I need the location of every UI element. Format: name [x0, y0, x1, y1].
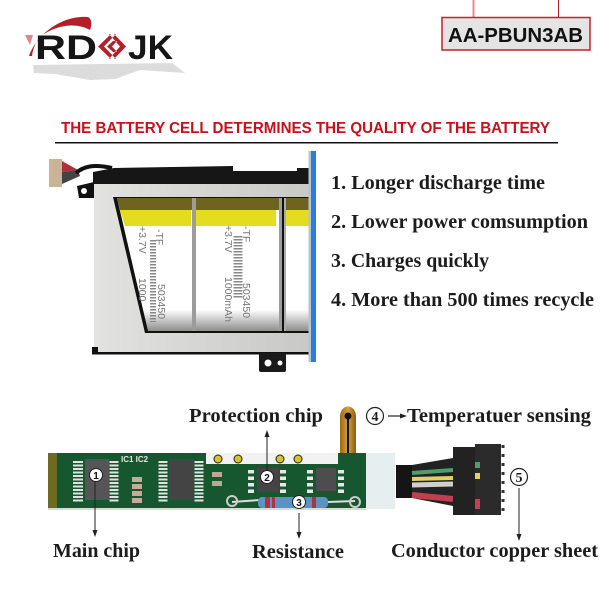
temperature sensor probe [340, 406, 356, 453]
cell 3 [286, 198, 311, 331]
cell 2 [196, 198, 279, 331]
cell 2: -TF [240, 226, 252, 242]
cell 1: -TF [153, 229, 165, 245]
feature list: 1. Longer discharge time [331, 173, 545, 194]
label: conductor copper sheet [391, 468, 599, 562]
label: protection chip: Protection chip [189, 406, 323, 427]
cell window [113, 197, 311, 333]
feature list: 4. More than 500 times recycle [331, 290, 594, 311]
cell 1: 503450 [155, 284, 167, 319]
label: main chip: Main chip [53, 541, 140, 562]
cable and connector [396, 444, 503, 515]
logo chevrons [98, 34, 126, 59]
feature list: 2. Lower power comsumption [331, 212, 588, 233]
component column [132, 477, 142, 505]
protection chip: 2 [264, 473, 270, 484]
right chip [310, 468, 341, 494]
feature list [331, 173, 594, 311]
main chip [78, 459, 114, 502]
board silkscreen: IC1 IC2 [121, 455, 149, 464]
protection chip [251, 468, 283, 494]
cell 2: +3.7V [222, 225, 234, 253]
cell separators [192, 198, 196, 331]
circuit board [48, 453, 395, 510]
label: conductor copper sheet: Conductor copper sheet [391, 541, 599, 562]
label: conductor copper sheet: 5 [516, 471, 522, 486]
logo swoosh [29, 17, 91, 56]
feature list: 3. Charges quickly [331, 251, 489, 272]
logo wordmark right: JK [128, 29, 173, 67]
mounting tab left [77, 182, 98, 198]
label: main chip [53, 482, 140, 562]
cell 1: +3.7V [136, 226, 148, 254]
model number tag: AA-PBUN3AB [448, 25, 583, 47]
cell 1: 1000 [136, 278, 148, 302]
label: protection chip [189, 406, 323, 470]
logo [25, 17, 185, 80]
logo triangle [25, 35, 33, 45]
cell 2: 1000mAh [222, 277, 234, 322]
small components [212, 472, 222, 490]
cell 2: 503450 [240, 283, 252, 318]
metal frame [94, 184, 311, 352]
mounting tab bottom [259, 353, 286, 372]
logo reflection [33, 63, 185, 80]
label: temperature sensing: 4 [372, 410, 378, 425]
second chip [163, 459, 199, 502]
model number tag [442, 0, 590, 50]
logo wordmark left: RD [35, 29, 97, 67]
battery illustration [49, 151, 316, 372]
resistor [227, 496, 360, 509]
black top band [93, 166, 311, 184]
label: resistance: Resistance [252, 542, 344, 563]
blue edge bar [311, 151, 316, 362]
resistor: 3 [296, 498, 302, 509]
pcb base [48, 453, 366, 509]
cell 1 [117, 198, 192, 331]
label: resistance [252, 513, 344, 563]
gold pads [214, 455, 302, 463]
copper strip [366, 453, 395, 509]
main chip: 1 [93, 471, 99, 482]
label: temperature sensing: Temperatuer sensing [407, 406, 591, 427]
heading: THE BATTERY CELL DETERMINES THE QUALITY OF THE BATTERY [61, 120, 550, 137]
connector [49, 159, 112, 187]
